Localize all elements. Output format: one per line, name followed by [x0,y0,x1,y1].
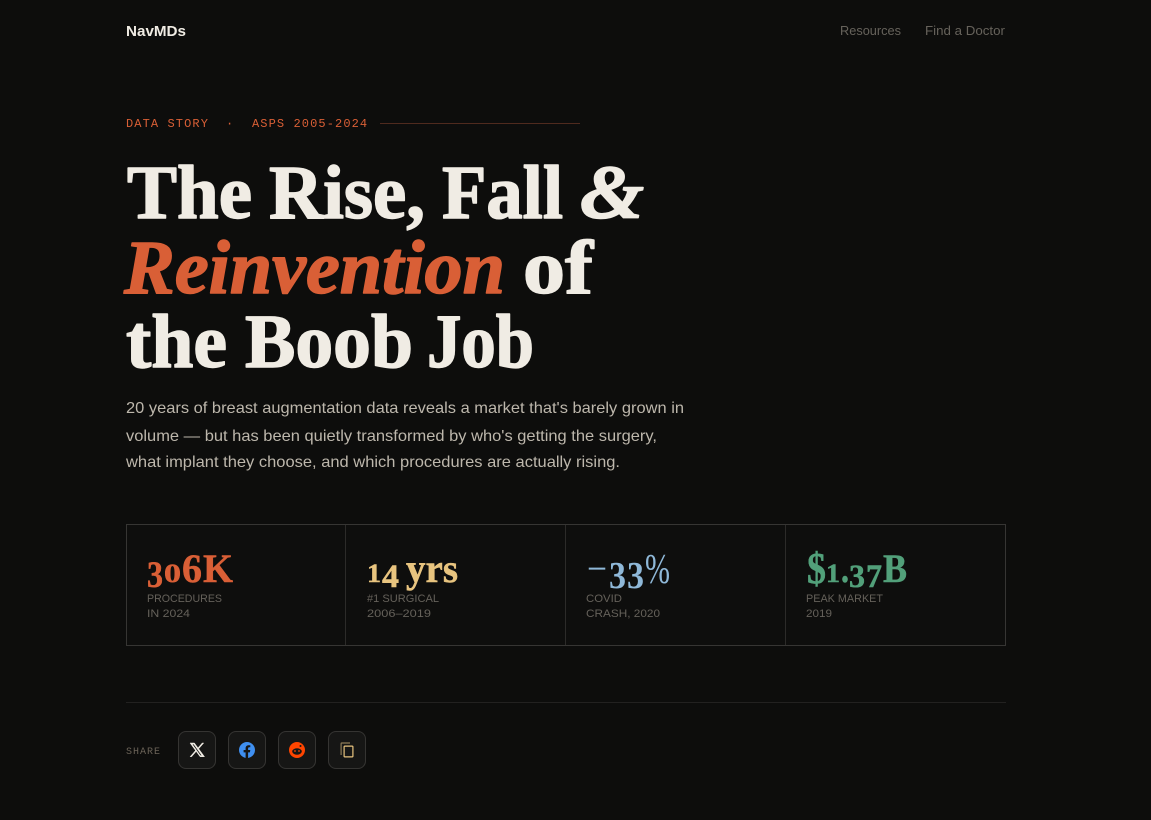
eyebrow: ASPS 2005-2024 [252,117,368,131]
stat: covid crash: 3 [627,555,644,597]
eyebrow: · [226,117,234,131]
stat: peak market: 2019 [806,608,832,620]
stat: peak market: PEAK MARKET [806,593,883,605]
intro paragraph: 20 years of breast augmentation data reveals a market that's barely grown in [126,400,684,417]
stat: years at number one: yrs [406,546,458,591]
icon: Reddit share button [278,732,316,768]
stat: covid crash: % [645,547,670,593]
stat: covid crash: 3 [609,555,626,597]
title: the [126,300,227,384]
stat: procedures [147,546,233,620]
intro paragraph [125,400,684,471]
stat: covid crash: CRASH, 2020 [586,608,660,620]
stat: procedures: 6 [182,546,202,591]
icon: copy link button [328,732,366,768]
stat: procedures: K [203,546,233,591]
stat: procedures: IN 2024 [147,608,190,620]
share row [126,732,366,768]
title [123,151,644,384]
stat: procedures: 3 [147,555,163,596]
icon: Facebook share button [228,732,266,768]
eyebrow [126,117,580,131]
title: of [523,226,595,310]
stat: peak market: 1 [826,559,840,588]
stat: peak market: 3 [849,559,865,595]
stat: years at number one: 4 [382,559,399,595]
logo: NavMDs [126,23,186,40]
navigation bar [126,23,1006,40]
stats panel [126,524,1006,646]
title: Rise, [269,151,425,235]
nav link: find a doctor: Find a Doctor [925,23,1006,38]
stat: covid crash: COVID [586,593,622,605]
title: Job [427,300,534,384]
title: The [127,151,252,235]
stat: peak market: B [883,546,907,591]
stat: peak market [806,544,907,620]
nav link: resources: Resources [840,23,901,38]
stat: covid crash: − [587,546,607,591]
stat: years at number one: #1 SURGICAL [367,593,439,605]
stat: years at number one: 1 [367,559,381,588]
stat: peak market: $ [807,544,826,593]
icon: X share button [178,732,216,768]
intro paragraph: what implant they choose, and which procedures are actually rising. [125,454,620,471]
title: Boob [245,300,413,384]
stat: covid crash [586,546,670,620]
stat: years at number one: 2006–2019 [367,608,431,620]
stat: procedures: 0 [164,559,181,588]
stat: years at number one [367,546,458,620]
stat: peak market: . [841,546,849,591]
stat: procedures: PROCEDURES [147,593,222,605]
share label: SHARE [126,747,161,758]
title: Fall [442,151,563,235]
eyebrow: DATA STORY [126,117,209,131]
stat: peak market: 7 [866,559,882,595]
title: & [580,151,644,235]
intro paragraph: volume — but has been quietly transformed by who's getting the surgery, [126,428,657,445]
title: Reinvention [123,226,505,310]
